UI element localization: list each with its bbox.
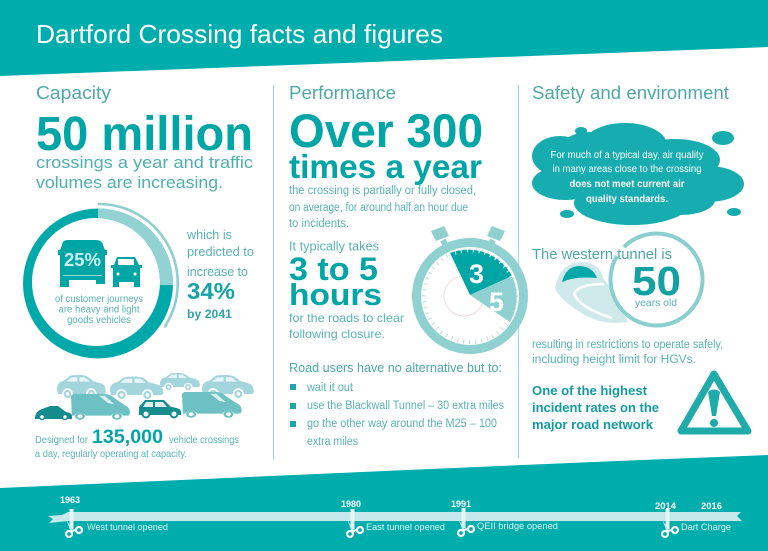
donut chart: 25 percent to 34 percent: [23, 204, 178, 358]
callout: predicted increase: predicted to: [187, 245, 254, 259]
callout: predicted increase: [186, 228, 254, 321]
text: closure description: to incidents.: [289, 218, 349, 230]
big number: over 300: Over 300: [289, 104, 483, 157]
text: closure description: the crossing is partially or fully closed,: [289, 185, 476, 197]
milestone: 2014: 2014: [655, 501, 677, 512]
icon: van: [58, 240, 107, 287]
text: for the roads to clear: following closure.: [289, 327, 385, 341]
text: 25%: 25%: [64, 250, 101, 270]
text: customer journeys: are heavy and light: [58, 304, 140, 316]
text: customer journeys: of customer journeys: [55, 294, 143, 305]
text: designed for 135,000: Designed for: [35, 434, 88, 446]
text: for the roads to clear: for the roads to clear: [289, 311, 404, 325]
icon: warning triangle: [681, 374, 748, 431]
text: road users: Road users have no alternative but to:: [289, 361, 502, 375]
callout: predicted increase: which is: [186, 228, 232, 242]
text: crossings a year: volumes are increasing.: [36, 173, 223, 192]
big text: 3 to 5 hours: 3 to 5: [289, 251, 378, 287]
milestone: 1980: 1980: [341, 499, 361, 510]
text: customer journeys: [55, 294, 143, 326]
milestone: 1991: QEII bridge opened: [477, 521, 558, 531]
big text: 3 to 5 hours: hours: [289, 277, 382, 312]
text: closure description: [289, 185, 476, 230]
panel: performance: [289, 82, 524, 448]
text: restrictions: resulting in restrictions to operate safely,: [532, 339, 723, 351]
callout: predicted increase: increase to: [187, 265, 248, 279]
panel: safety and environment: [532, 82, 748, 432]
list: alternatives: use the Blackwall Tunnel – 30 extra miles: [307, 400, 504, 412]
text: crossings a year: [36, 153, 254, 192]
illustration: queue of vehicles: [35, 373, 254, 420]
cloud text: in many areas close to the crossing: [552, 164, 702, 175]
list: alternatives: [290, 382, 504, 448]
milestone: 2016: 2016: [701, 501, 722, 512]
icon: stopwatch: [416, 226, 524, 350]
milestone: 2014: [655, 501, 731, 537]
milestone: 1980: East tunnel opened: [366, 522, 445, 532]
text: designed for 135,000: vehicle crossings: [169, 434, 239, 446]
badge: 50 years old: [611, 234, 703, 326]
list: alternatives: wait it out: [306, 382, 354, 394]
badge: 50 years old: 50: [632, 258, 681, 304]
text: incident rates: incident rates on the: [532, 401, 659, 415]
milestone: 1980: [341, 499, 445, 537]
text: restrictions: [532, 339, 723, 366]
panel: capacity: [23, 82, 254, 460]
text: it typically takes: It typically takes: [289, 240, 379, 254]
text: designed for 135,000: [35, 426, 239, 460]
text: customer journeys: goods vehicles: [67, 315, 131, 326]
badge: 50 years old: years old: [635, 298, 677, 309]
icon: car: [111, 257, 142, 287]
milestone: 1991: 1991: [451, 499, 472, 510]
big number: 50 million: 50 million: [36, 108, 253, 161]
text: incident rates: [532, 384, 659, 432]
icon: tunnel: [555, 235, 701, 323]
text: restrictions: including height limit for HGVs.: [532, 354, 696, 366]
milestone: 1991: [451, 499, 558, 536]
text: designed for 135,000: a day, regularly operating at capacity.: [35, 448, 187, 460]
big text: times a year: times a year: [289, 148, 482, 185]
text: incident rates: One of the highest: [532, 384, 648, 398]
callout: predicted increase: by 2041: [187, 309, 233, 321]
text: crossings a year: crossings a year and traffic: [36, 153, 254, 172]
milestone: 2014: Dart Charge: [681, 522, 731, 532]
cloud: air quality: [532, 123, 744, 225]
text: closure description: on average, for around half an hour due: [289, 202, 468, 214]
text: incident rates: major road network: [532, 418, 653, 432]
heading: safety and environment: Safety and environment: [532, 82, 729, 103]
stopwatch numbers: 5: [489, 287, 504, 317]
milestone: 1963: West tunnel opened: [87, 522, 168, 532]
list: alternatives: go the other way around the M25 – 100: [307, 418, 497, 430]
stopwatch numbers: 3: [469, 259, 484, 289]
big text: 3 to 5 hours: [289, 251, 382, 312]
cloud text: quality standards.: [586, 194, 668, 205]
heading: performance: Performance: [289, 82, 396, 103]
callout: predicted increase: 34%: [187, 278, 235, 304]
wedge: 5 hours: [470, 276, 517, 322]
cloud text: For much of a typical day, air quality: [550, 150, 704, 161]
title: Dartford Crossing facts and figures: [36, 19, 443, 49]
milestone: 1963: 1963: [60, 495, 80, 506]
text: western tunnel is: The western tunnel is: [532, 246, 672, 263]
footer timeline band: [0, 455, 768, 551]
cloud text: [550, 150, 704, 205]
timeline ribbon: [48, 512, 742, 523]
text: designed for 135,000: 135,000: [92, 426, 163, 448]
stopwatch numbers: [469, 259, 504, 317]
milestone: 1963: [60, 495, 168, 537]
wedge: 3 hours: [450, 250, 512, 295]
header banner: [0, 0, 768, 76]
column dividers: [274, 85, 518, 460]
cloud text: does not meet current air: [570, 179, 685, 190]
list: alternatives: extra miles: [307, 436, 358, 448]
heading: capacity: Capacity: [36, 82, 112, 103]
text: for the roads to clear: [289, 311, 404, 341]
